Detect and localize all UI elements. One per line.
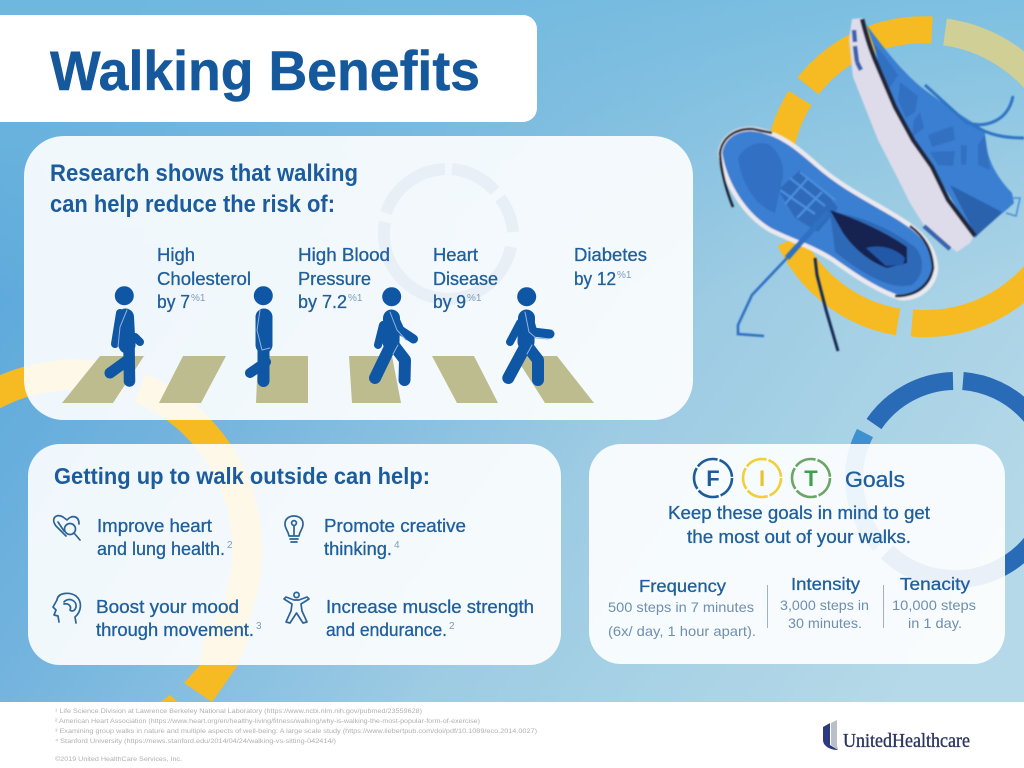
text: mood: Boost your mood: [96, 597, 239, 617]
text: muscle strength: 2: [449, 621, 455, 632]
heel shade: [950, 185, 1002, 236]
footnotes: ©2019 United HealthCare Services, Inc.: [55, 755, 182, 763]
footer band: [0, 702, 1024, 768]
decorative pale ring: [384, 169, 513, 299]
text: creative thinking: Promote creative: [324, 516, 466, 536]
icon: person stretching: [284, 592, 309, 623]
text: muscle strength: and endurance.: [326, 620, 447, 640]
black midsole line: [862, 19, 975, 236]
stat: heart disease: [433, 245, 498, 312]
blue lace: [787, 212, 828, 258]
stat: high blood pressure: by 7.2: [298, 292, 347, 312]
dark lace: [815, 258, 838, 351]
text: heart and lung: Improve heart: [97, 516, 212, 536]
intro text: Keep these goals in mind to get: [668, 503, 930, 523]
stat: high cholesterol: [157, 245, 251, 312]
panel: FIT goals: [589, 444, 1005, 664]
stat: diabetes: [574, 245, 647, 289]
shoe opening: [830, 210, 907, 268]
stat: diabetes: %1: [617, 270, 632, 281]
footnotes: ³ Examining group walks in nature and multiple aspects of well-being: A large scale study (https://www.liebertpub.com/doi/pdf/10.1089/eco.2014.0027): [55, 728, 537, 735]
title panel: [0, 15, 537, 122]
divider: [883, 585, 884, 628]
column: intensity: Intensity: [791, 574, 860, 594]
shoe: lying left shoe: [720, 129, 936, 351]
stat: diabetes: Diabetes: [574, 245, 647, 265]
FIT badge I: I: [759, 466, 765, 491]
icon: heart with magnifier: [54, 516, 80, 540]
heel tab: [1006, 198, 1020, 216]
goals label: Goals: [845, 467, 905, 492]
footnotes: ² American Heart Association (https://www.heart.org/en/healthy-living/fitness/walking/why-is-walking-the-most-popular-form-of-exercise): [55, 718, 480, 725]
logo: UnitedHealthcare: UnitedHealthcare: [843, 730, 970, 752]
text: heart and lung: and lung health.: [97, 539, 225, 559]
column: intensity: 3,000 steps in: [780, 597, 869, 613]
icon: lightbulb: [285, 516, 303, 542]
text: muscle strength: [326, 597, 534, 640]
text: mood: through movement.: [96, 620, 254, 640]
column: tenacity: in 1 day.: [908, 615, 962, 631]
FIT badge I: [743, 459, 781, 497]
shoe: upright right shoe: [849, 18, 1024, 252]
title: Walking Benefits: [50, 39, 480, 102]
stat: high blood pressure: %1: [348, 293, 363, 304]
stat: high blood pressure: Pressure: [298, 269, 371, 289]
column: intensity: [780, 574, 869, 631]
stat: heart disease: %1: [467, 293, 482, 304]
laces: [925, 85, 1024, 138]
text: heart and lung: [97, 516, 233, 559]
shoe upper: [866, 24, 1014, 238]
ring: yellow top right: [778, 30, 1024, 324]
stat: heart disease: Heart: [433, 245, 478, 265]
heading: [50, 160, 358, 218]
stat: high blood pressure: High Blood: [298, 245, 390, 265]
mesh patches: [874, 44, 990, 170]
walker 3: [375, 287, 414, 380]
text: creative thinking: thinking.: [324, 539, 392, 559]
intro text: the most out of your walks.: [687, 527, 911, 547]
stat: diabetes: by 12: [574, 269, 616, 289]
divider: [767, 585, 768, 628]
stat: high cholesterol: %1: [191, 293, 206, 304]
column: intensity: 30 minutes.: [788, 615, 862, 631]
stat: high cholesterol: by 7: [157, 292, 190, 312]
intro text: [668, 503, 930, 547]
column: tenacity: [892, 574, 976, 631]
heading: can help reduce the risk of:: [50, 191, 335, 218]
stat: heart disease: Disease: [433, 269, 498, 289]
column: frequency: (6x/ day, 1 hour apart).: [608, 623, 756, 639]
text: muscle strength: Increase muscle strength: [326, 597, 534, 617]
footnotes: ¹ Life Science Division at Lawrence Berkeley National Laboratory (https://www.ncbi.nlm.nih.gov/pubmed/23559628): [55, 708, 422, 715]
column: frequency: [608, 576, 756, 639]
sole tread: [854, 30, 950, 249]
footnotes: ⁴ Stanford University (https://news.stanford.edu/2014/04/24/walking-vs-sitting-042414/): [55, 738, 336, 745]
stat: high blood pressure: [298, 245, 390, 312]
text: mood: [96, 597, 262, 640]
column: tenacity: Tenacity: [900, 574, 970, 594]
logo shield: [823, 720, 838, 750]
ring: blue lower right: [854, 381, 1024, 579]
lace area: [778, 170, 838, 232]
walker 4: [508, 287, 550, 380]
FIT badge T: T: [804, 466, 818, 491]
column: tenacity: 10,000 steps: [892, 597, 976, 613]
black edge: [720, 129, 933, 296]
white sole: [849, 18, 974, 252]
footnotes: [55, 708, 537, 763]
stat: high cholesterol: High: [157, 245, 195, 265]
FIT badge F: F: [706, 466, 720, 491]
toe mesh: [738, 143, 783, 213]
FIT badge F: [694, 459, 732, 497]
walker 1: [110, 286, 140, 381]
FIT badge T: [792, 459, 830, 497]
text: mood: 3: [256, 621, 262, 632]
stat: high cholesterol: Cholesterol: [157, 269, 251, 289]
icon: head with brain: [53, 593, 80, 623]
panel: research risk reduction: [24, 136, 693, 420]
walker 2: [250, 286, 273, 381]
logo: UnitedHealthcare: [823, 720, 970, 752]
text: creative thinking: [324, 516, 466, 559]
heading: Research shows that walking: [50, 160, 358, 187]
stat: heart disease: by 9: [433, 292, 466, 312]
crosswalk: [62, 356, 594, 403]
collar shading: [830, 212, 922, 286]
sole edge: [720, 129, 936, 298]
ring: yellow left: [0, 375, 250, 702]
text: heart and lung: 2: [227, 540, 233, 551]
text: creative thinking: 4: [394, 540, 400, 551]
column: frequency: 500 steps in 7 minutes: [608, 599, 754, 615]
heading: Getting up to walk outside can help:: [54, 463, 430, 489]
panel: getting outside: [28, 444, 561, 665]
column: frequency: Frequency: [639, 576, 726, 596]
